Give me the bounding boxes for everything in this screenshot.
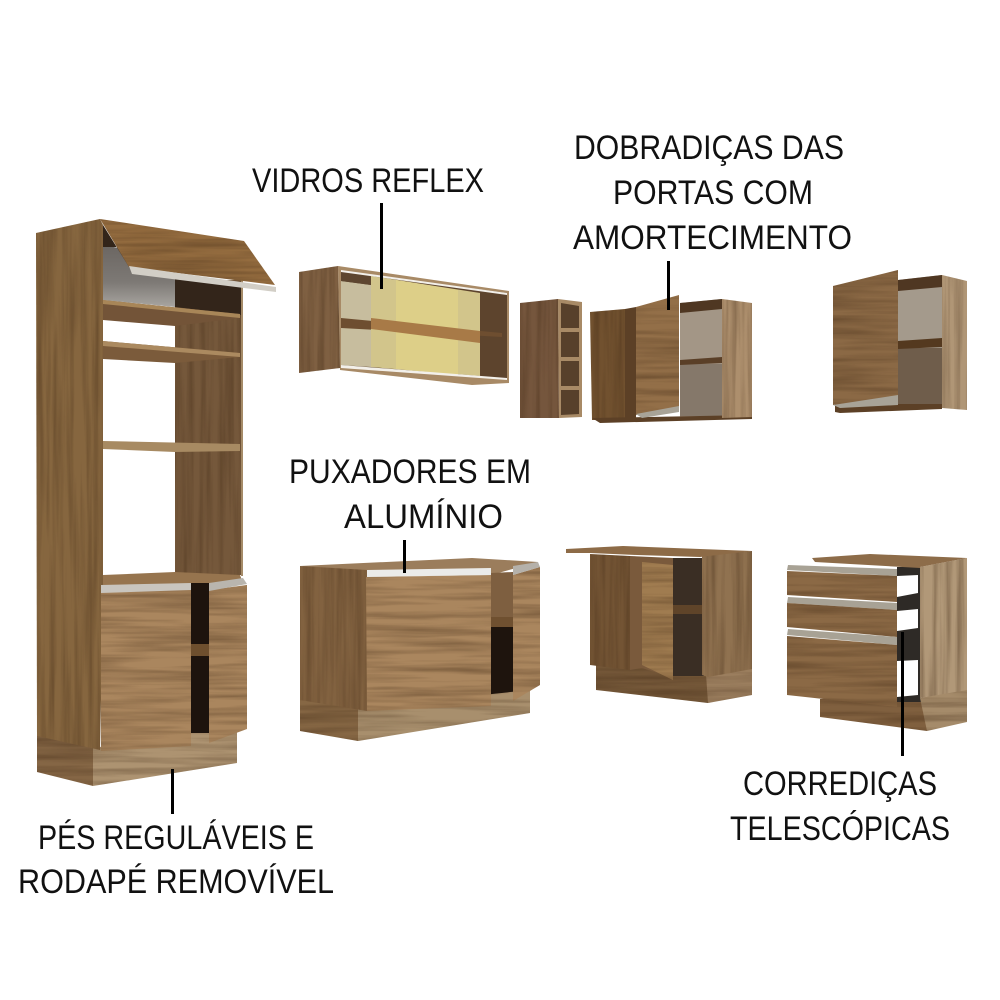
drawer cabinet interior <box>897 567 921 702</box>
drawer box white 2 <box>897 609 918 631</box>
glass wall cabinet <box>299 266 509 385</box>
right wall interior shelf <box>898 338 942 349</box>
low cabinet interior lower <box>491 626 513 697</box>
corner base cabinet <box>566 546 752 703</box>
tower left handle <box>101 583 191 593</box>
leader line: pés reguláveis <box>171 769 174 814</box>
low cabinet top <box>300 558 538 577</box>
corner wall middle strip <box>625 307 636 420</box>
drawer 2 handle <box>787 597 897 610</box>
drawer cabinet plinth side <box>920 688 967 731</box>
drawer cabinet side <box>920 558 967 698</box>
tower interior <box>191 583 209 733</box>
corner base middle strip <box>630 556 673 678</box>
tower dark top strip <box>103 225 241 315</box>
niche shelf 3 <box>560 386 580 390</box>
niche front frame <box>558 299 582 418</box>
leader line: vidros reflex <box>380 203 383 289</box>
corner wall door <box>636 295 679 415</box>
label: dobradiças das portas com amortecimento: DOBRADIÇAS DAS <box>574 129 844 167</box>
label: pés reguláveis e rodapé removível: RODAPÉ REMOVÍVEL <box>18 863 334 901</box>
corner base interior <box>672 558 704 676</box>
drawer cabinet top <box>812 554 967 568</box>
right wall side <box>942 275 967 410</box>
tower plinth side <box>37 734 100 786</box>
low cabinet plinth front <box>358 690 530 741</box>
low cabinet interior shelf <box>491 617 513 627</box>
drawer cabinet plinth front <box>820 697 930 731</box>
drawer box white 3 <box>897 660 918 697</box>
label: pés reguláveis e rodapé removível <box>18 819 334 901</box>
right wall door handle <box>833 395 898 408</box>
corner base interior shelf <box>672 605 702 614</box>
niche shelf 1 <box>560 328 580 332</box>
low cabinet front handle <box>367 568 491 577</box>
tower right handle <box>209 578 247 591</box>
low cabinet with aluminium handles <box>300 558 540 741</box>
tall oven tower cabinet <box>36 219 276 786</box>
tower interior shelf <box>191 644 209 656</box>
tower right edge <box>241 280 243 576</box>
corner wall door handle <box>636 406 679 418</box>
drawer 1 handle <box>787 565 897 576</box>
niche side <box>520 299 559 418</box>
drawer box white 1 <box>897 575 918 597</box>
label: pés reguláveis e rodapé removível: PÉS REGULÁVEIS E <box>38 819 314 857</box>
glass cabinet left interior <box>341 281 371 367</box>
tower back panel <box>175 280 241 575</box>
glass cabinet interior <box>341 271 507 379</box>
drawer 3 handle <box>787 629 897 645</box>
right wall door <box>833 270 898 405</box>
low cabinet side <box>300 566 367 711</box>
tower counter top <box>103 572 243 586</box>
label: corrediças telescópicas: TELESCÓPICAS <box>730 810 950 848</box>
corner wall side <box>722 299 752 418</box>
low cabinet side door <box>513 567 540 701</box>
label: dobradiças das portas com amortecimento: AMORTECIMENTO <box>573 219 852 257</box>
corner base top <box>566 546 752 557</box>
leader line: puxadores <box>403 540 406 573</box>
right wall interior upper <box>898 275 942 407</box>
right wall interior lower <box>898 348 942 407</box>
corner wall interior top band <box>680 299 722 313</box>
corner base plinth side <box>706 666 752 703</box>
narrow niche cabinet <box>520 299 582 418</box>
glass panel centre tone <box>396 280 458 375</box>
tower plinth front <box>93 726 237 786</box>
leader line: corrediças <box>901 632 904 756</box>
tower left door <box>101 588 191 751</box>
drawer cabinet <box>787 554 967 731</box>
tower lift-up door <box>100 219 275 285</box>
label: corrediças telescópicas: CORREDIÇAS <box>743 765 937 803</box>
leader line: dobradiças <box>667 261 670 310</box>
tower lift-up handle <box>129 266 276 292</box>
right wall bottom <box>835 404 942 413</box>
glass cabinet shelf <box>341 318 502 337</box>
niche shelf 2 <box>560 357 580 361</box>
low cabinet side handle <box>513 562 540 575</box>
low cabinet plinth side <box>300 698 367 741</box>
tower shelf 2 edge <box>103 341 240 357</box>
right wall cabinet with door <box>833 270 967 413</box>
low cabinet interior upper <box>491 572 513 617</box>
corner wall interior lower <box>680 364 722 416</box>
right wall top band <box>898 275 942 291</box>
label: puxadores em alumínio: PUXADORES EM <box>289 453 531 491</box>
label: dobradiças das portas com amortecimento: PORTAS COM <box>613 174 813 212</box>
label: corrediças telescópicas <box>730 765 950 848</box>
low cabinet front door <box>366 575 491 711</box>
drawer 1 front <box>787 571 897 602</box>
tower right door <box>209 585 247 743</box>
corner wall interior shelf <box>680 357 722 365</box>
label: puxadores em alumínio: ALUMÍNIO <box>344 498 503 536</box>
glass cabinet frame <box>338 266 509 385</box>
tower shelf 1 edge <box>103 300 240 318</box>
tower upper compartment <box>103 245 175 307</box>
label: dobradiças das portas com amortecimento <box>573 129 852 257</box>
corner wall cabinet with door <box>590 295 752 423</box>
tower side panel <box>36 219 103 750</box>
label: vidros reflex: VIDROS REFLEX <box>252 162 484 200</box>
corner base plinth front <box>596 664 710 703</box>
corner wall bottom <box>592 415 752 423</box>
glass cabinet bottom aluminium <box>341 365 507 380</box>
glass cabinet interior top <box>341 271 371 285</box>
corner wall left panel <box>590 309 625 420</box>
drawer 3 front <box>787 636 897 707</box>
tower shelf 1 <box>103 300 240 326</box>
tower shelf 3 <box>103 441 240 452</box>
glass cabinet top aluminium <box>341 270 507 295</box>
drawer 2 front <box>787 603 897 637</box>
label: puxadores em alumínio <box>289 453 531 536</box>
corner base side <box>702 551 752 677</box>
glass cabinet side <box>299 266 340 373</box>
corner base left door <box>590 554 630 670</box>
corner base door <box>642 562 673 680</box>
glass panel shelf reflection <box>371 318 480 343</box>
tower shelf 2 <box>103 341 240 363</box>
glass panel reflex <box>371 276 480 376</box>
corner wall interior upper <box>680 299 722 417</box>
niche interior <box>561 303 579 415</box>
